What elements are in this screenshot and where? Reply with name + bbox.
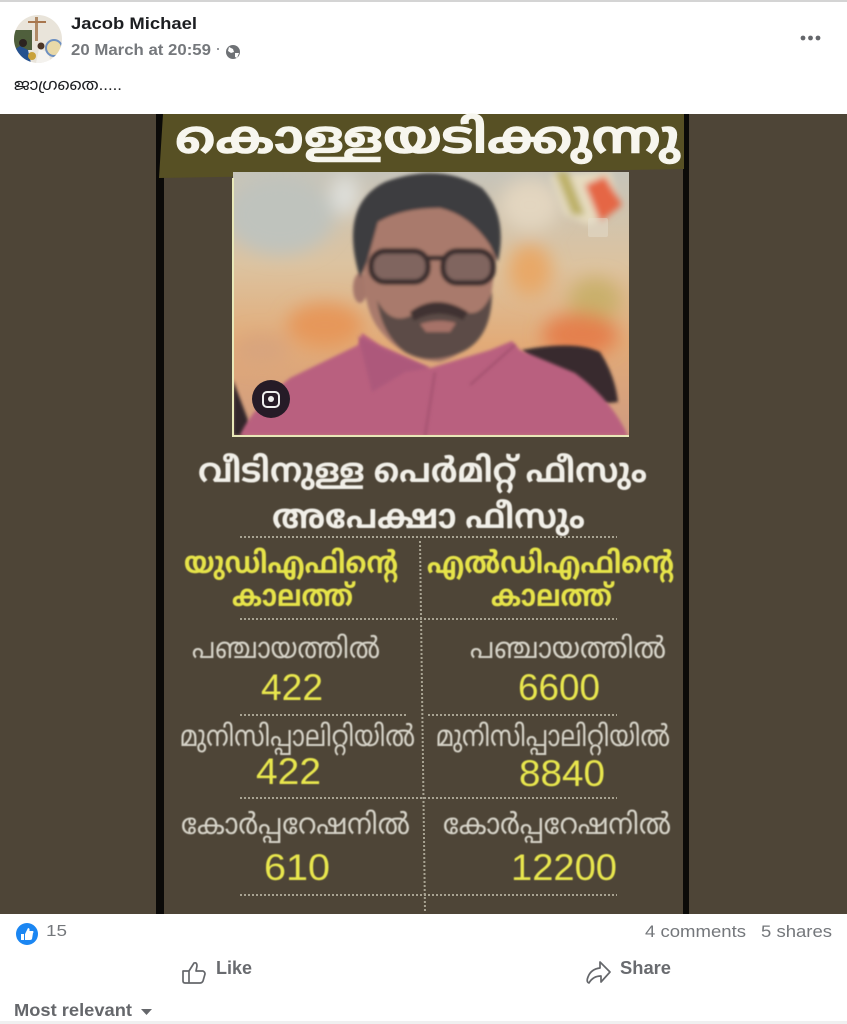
post header [14, 14, 820, 94]
municipality fee: മുനിസിപ്പാലിറ്റിയിൽ [436, 721, 670, 756]
corporation fee [181, 809, 410, 888]
like button: Like [216, 958, 252, 978]
lower lip [420, 321, 456, 332]
municipality fee [436, 721, 670, 794]
municipality fee [180, 721, 415, 792]
corporation fee: 12200 [511, 847, 617, 888]
post caption: ജാഗ്രതൈ..... [14, 77, 122, 94]
face [363, 205, 498, 362]
comment count: 4 comments [645, 922, 746, 941]
panchayat fee: പഞ്ചായത്തിൽ [470, 633, 666, 665]
table: UDF column [180, 547, 415, 888]
corporation fee: കോർപ്പറേഷനിൽ [181, 809, 410, 844]
column heading: LDF [427, 547, 674, 613]
column heading: LDF: എൽഡിഎഫിന്റെ [427, 547, 674, 584]
heading line 1: വീടിനുള്ള പെർമിറ്റ് ഫീസും [198, 452, 647, 494]
photo of man [225, 172, 629, 436]
panchayat fee: 422 [261, 667, 323, 708]
panchayat fee [192, 633, 380, 708]
column heading: UDF [184, 547, 398, 613]
phone frame edges [156, 114, 689, 914]
avatar [14, 15, 62, 63]
share count: 5 shares [761, 922, 832, 941]
title banner [159, 114, 684, 178]
municipality fee: 8840 [519, 753, 605, 794]
share button [587, 958, 671, 983]
hair [353, 173, 501, 278]
photo backdrop [233, 172, 629, 436]
shirt [240, 333, 628, 436]
watermark [588, 218, 608, 237]
panchayat fee: പഞ്ചായത്തിൽ [192, 633, 380, 665]
glasses [371, 251, 493, 283]
panchayat fee: 6600 [518, 667, 600, 708]
panchayat fee [470, 633, 666, 708]
photo borders [233, 178, 629, 436]
icon: globe [226, 45, 240, 59]
author name: Jacob Michael [71, 14, 197, 33]
comment sort: Most relevant [14, 1000, 132, 1020]
separator dot [217, 48, 219, 50]
municipality fee: 422 [256, 751, 321, 792]
like button [183, 958, 252, 983]
moustache [410, 302, 468, 321]
infographic image [0, 111, 847, 914]
table dividers [240, 537, 617, 912]
title text: കൊള്ളയടിക്കുന്നു [175, 111, 681, 164]
icon: lens button [252, 380, 290, 418]
chair [522, 345, 618, 405]
post date: 20 March at 20:59 [71, 42, 211, 59]
corporation fee [443, 809, 671, 888]
column heading: UDF: യുഡിഎഫിന്റെ [184, 547, 398, 584]
heading line 2: അപേക്ഷാ ഫീസും [272, 498, 585, 536]
corporation fee: കോർപ്പറേഷനിൽ [443, 809, 671, 844]
icon: like badge [16, 923, 38, 945]
like count: 15 [46, 923, 67, 940]
table: LDF column [427, 547, 674, 888]
column heading: UDF: കാലത്ത് [232, 580, 356, 613]
image background [0, 114, 847, 914]
beard [377, 292, 492, 359]
ear [353, 273, 367, 303]
municipality fee: മുനിസിപ്പാലിറ്റിയിൽ [180, 721, 415, 756]
icon: more options [801, 36, 820, 40]
column heading: LDF: കാലത്ത് [491, 580, 615, 613]
corporation fee: 610 [264, 847, 330, 888]
engagement bar [0, 922, 847, 1024]
share button: Share [620, 958, 671, 978]
subtitle heading [198, 452, 647, 536]
